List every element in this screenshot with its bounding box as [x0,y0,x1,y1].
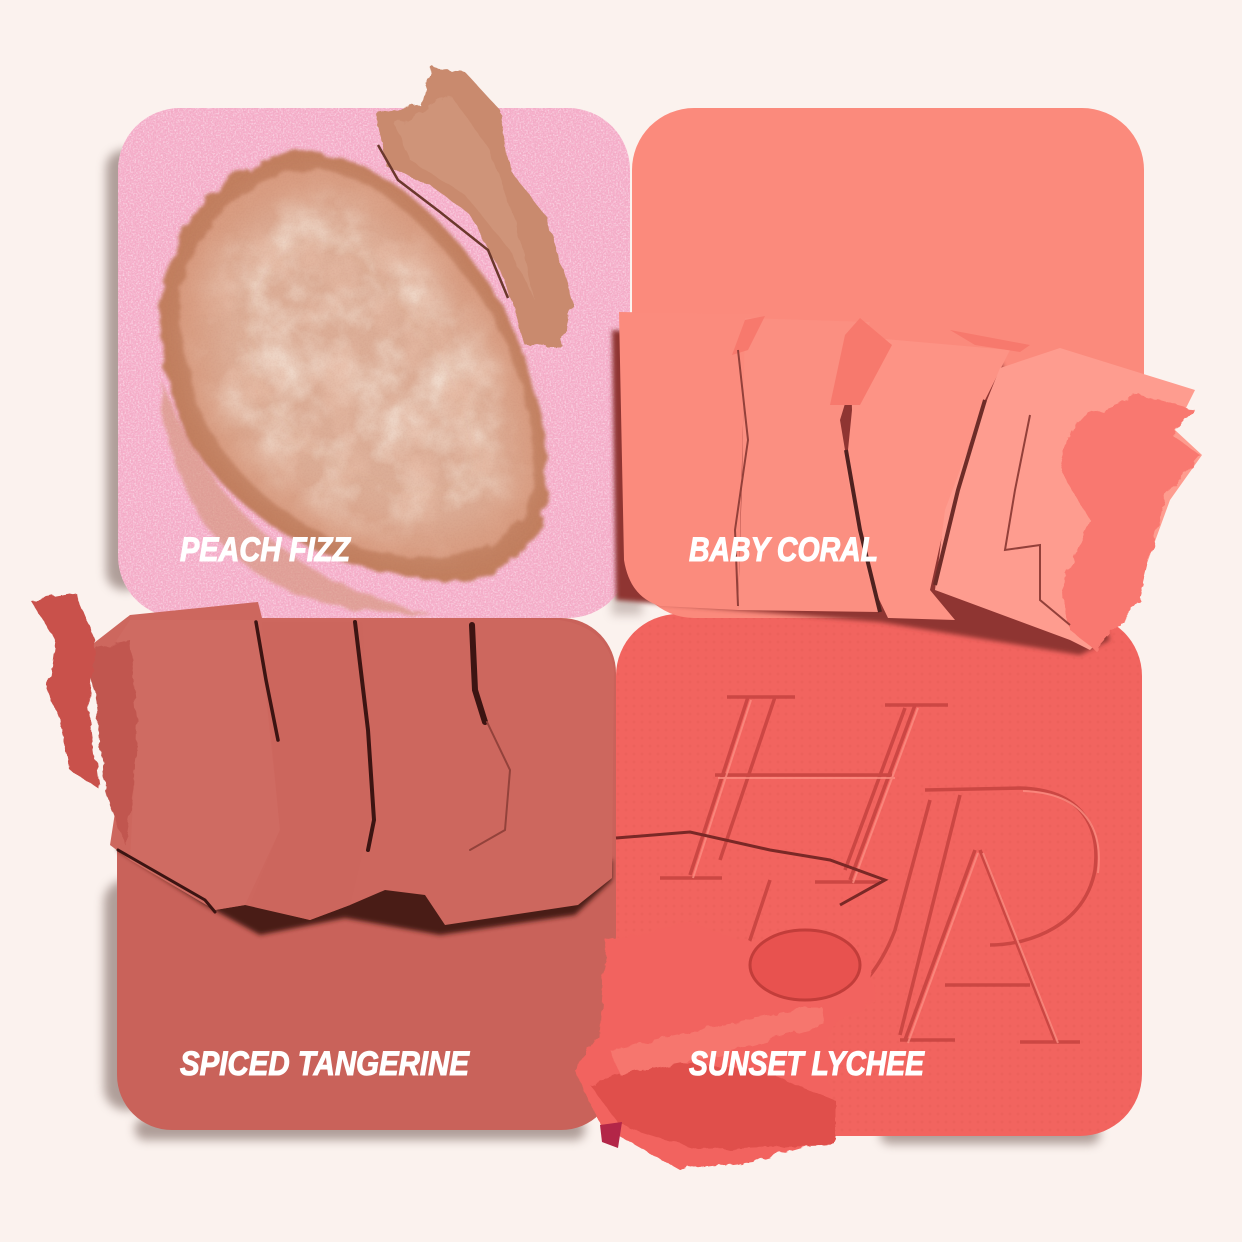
panel: sunset lychee pan [575,614,1142,1170]
letter R [900,788,1096,1035]
letter H [660,697,948,882]
sparkle texture [118,108,630,618]
crack [378,145,508,298]
monogram highlight [693,700,1099,1043]
terracotta powder [117,618,616,1130]
smear sheet 4 [935,348,1202,650]
smear dark mottling [254,255,485,498]
letter A [900,850,1080,1042]
upper flake highlight [395,95,535,300]
smear sheet [85,602,614,925]
upper flake [378,68,572,345]
label: peach fizz: PEACH FIZZ [180,531,351,569]
flakes [732,316,1030,405]
crack [616,832,885,905]
smear light mottling [199,191,514,535]
sheet shading 1 [110,620,280,910]
smear grain [118,108,630,618]
cracks [735,350,1070,625]
powder weave [616,614,1142,1136]
red-coral powder [616,614,1142,1136]
smear shadow [612,330,1110,655]
smear ridge [610,1005,825,1075]
panel: spiced tangerine pan [30,592,616,1130]
smear shadow [118,830,612,935]
label: sunset lychee: SUNSET LYCHEE [689,1045,925,1083]
smear sheet 1 [619,312,760,610]
smear light centre [188,180,536,553]
coral powder [632,108,1144,618]
smear sheet 2 [738,318,880,612]
smear base [178,170,533,557]
oval crumb [750,930,860,1000]
pan shadows [104,150,1100,1144]
label: spiced tangerine: SPICED TANGERINE [180,1045,470,1083]
smear crumbs shade [590,1060,835,1150]
rolled left edge [85,640,138,845]
crumbled edge [1060,395,1200,650]
cracks [118,622,510,912]
panel: baby coral pan [612,108,1202,655]
label: baby coral: BABY CORAL [689,531,878,569]
letter U/J [733,800,930,1023]
crumbs left [30,592,100,790]
smear lower left [575,922,875,1170]
magenta crumbs [600,1122,622,1148]
smear sheet 3 [846,336,1010,620]
sheet shading 2 [250,622,375,920]
smear dark rim [160,152,547,582]
panel: peach fizz pan [118,68,630,618]
embossed HUDA monogram [660,697,1096,1042]
smear lower fade [160,380,430,613]
pink pressed powder [118,108,630,618]
